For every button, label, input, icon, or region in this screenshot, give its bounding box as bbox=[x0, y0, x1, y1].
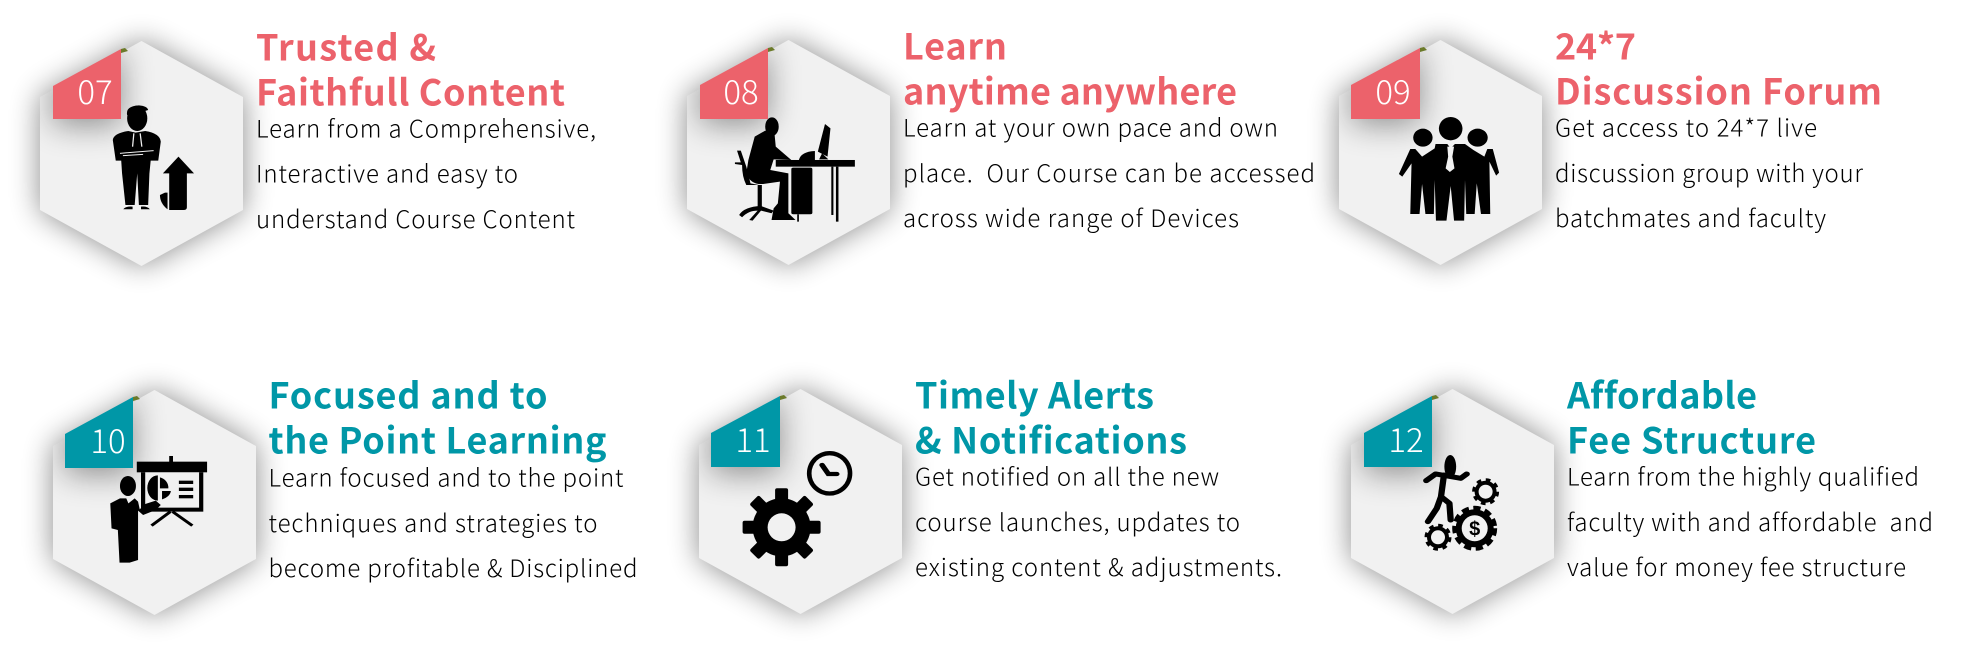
description 08: place. Our Course can be accessed bbox=[903, 154, 1315, 189]
description 07: understand Course Content bbox=[256, 200, 576, 235]
hexagon badge 09: 09 bbox=[1375, 66, 1411, 114]
hexagon badge 12 bbox=[1351, 389, 1554, 614]
icon: group of three people bbox=[1399, 117, 1499, 221]
description 08: across wide range of Devices bbox=[903, 199, 1239, 234]
hexagon badge 08: 08 bbox=[723, 66, 759, 114]
heading 08: anytime anywhere bbox=[903, 64, 1237, 116]
card 08: learn anytime bbox=[687, 18, 1315, 265]
card 10: focused learning bbox=[53, 368, 638, 615]
heading 09: 24*7 bbox=[1555, 18, 1636, 70]
icon: person working at a desk bbox=[735, 117, 855, 222]
description 10: Learn focused and to the point bbox=[268, 458, 624, 494]
description 11 bbox=[915, 458, 1282, 583]
hexagon badge 09 bbox=[1339, 40, 1542, 265]
card 07: trusted content bbox=[40, 20, 596, 266]
icon: climbing figure bbox=[1426, 455, 1467, 522]
description 07: Learn from a Comprehensive, bbox=[256, 110, 596, 144]
heading 07: Trusted & bbox=[256, 20, 436, 72]
heading 12: Affordable bbox=[1566, 368, 1757, 420]
description 08 bbox=[903, 108, 1315, 234]
icon: gear bbox=[743, 488, 821, 566]
heading 07 bbox=[256, 20, 565, 116]
icon: clock and gear bbox=[743, 451, 852, 566]
heading 11 bbox=[915, 368, 1187, 464]
hexagon badge 10: 10 bbox=[90, 415, 126, 463]
heading 07: Faithfull Content bbox=[256, 64, 565, 116]
card 12: affordable fees bbox=[1351, 368, 1933, 614]
heading 09 bbox=[1555, 18, 1882, 116]
hexagon badge 10 bbox=[53, 390, 256, 615]
description 09 bbox=[1555, 108, 1863, 234]
icon: dollar gear: $ bbox=[1469, 518, 1480, 540]
description 12: value for money fee structure bbox=[1567, 548, 1906, 583]
heading 08: Learn bbox=[903, 18, 1007, 70]
description 08: Learn at your own pace and own bbox=[903, 108, 1278, 144]
hexagon badge 12: 12 bbox=[1388, 414, 1424, 462]
description 07: Interactive and easy to bbox=[256, 154, 518, 190]
card 11: timely alerts bbox=[699, 368, 1282, 614]
heading 10 bbox=[268, 368, 606, 464]
description 09: batchmates and faculty bbox=[1555, 199, 1826, 234]
hexagon badge 11 bbox=[699, 389, 902, 614]
heading 10: Focused and to bbox=[268, 368, 548, 420]
heading 09: Discussion Forum bbox=[1555, 64, 1882, 116]
heading 12: Fee Structure bbox=[1567, 412, 1816, 464]
hexagon badge 11: 11 bbox=[735, 414, 771, 462]
heading 12 bbox=[1566, 368, 1816, 464]
card 09: discussion forum bbox=[1339, 18, 1882, 265]
description 10: become profitable & Disciplined bbox=[268, 549, 638, 584]
heading 08 bbox=[903, 18, 1237, 116]
description 09: Get access to 24*7 live bbox=[1555, 108, 1817, 144]
description 10 bbox=[268, 458, 638, 584]
icon: presenter at a chart board bbox=[110, 456, 207, 563]
hexagon badge 08 bbox=[687, 40, 890, 265]
hexagon badge 07: 07 bbox=[77, 66, 113, 114]
hexagon badge 07 bbox=[40, 41, 243, 266]
description 11: course launches, updates to bbox=[915, 503, 1240, 538]
heading 11: & Notifications bbox=[915, 412, 1187, 464]
heading 11: Timely Alerts bbox=[915, 368, 1154, 420]
description 10: techniques and strategies to bbox=[268, 504, 598, 539]
description 11: existing content & adjustments. bbox=[915, 548, 1282, 583]
icon: climbing figure on money gears bbox=[1426, 455, 1497, 549]
description 07 bbox=[256, 110, 596, 235]
description 12: Learn from the highly qualified bbox=[1567, 458, 1919, 492]
icon: clock bbox=[807, 451, 852, 496]
description 12: faculty with and affordable and bbox=[1567, 503, 1933, 538]
description 12 bbox=[1567, 458, 1933, 583]
description 11: Get notified on all the new bbox=[915, 458, 1219, 492]
heading 10: the Point Learning bbox=[268, 412, 606, 464]
icon: businessman with up arrow bbox=[113, 105, 194, 210]
icon: small lower gear bbox=[1426, 526, 1450, 549]
description 09: discussion group with your bbox=[1555, 154, 1863, 189]
icon: small upper gear bbox=[1474, 480, 1497, 503]
